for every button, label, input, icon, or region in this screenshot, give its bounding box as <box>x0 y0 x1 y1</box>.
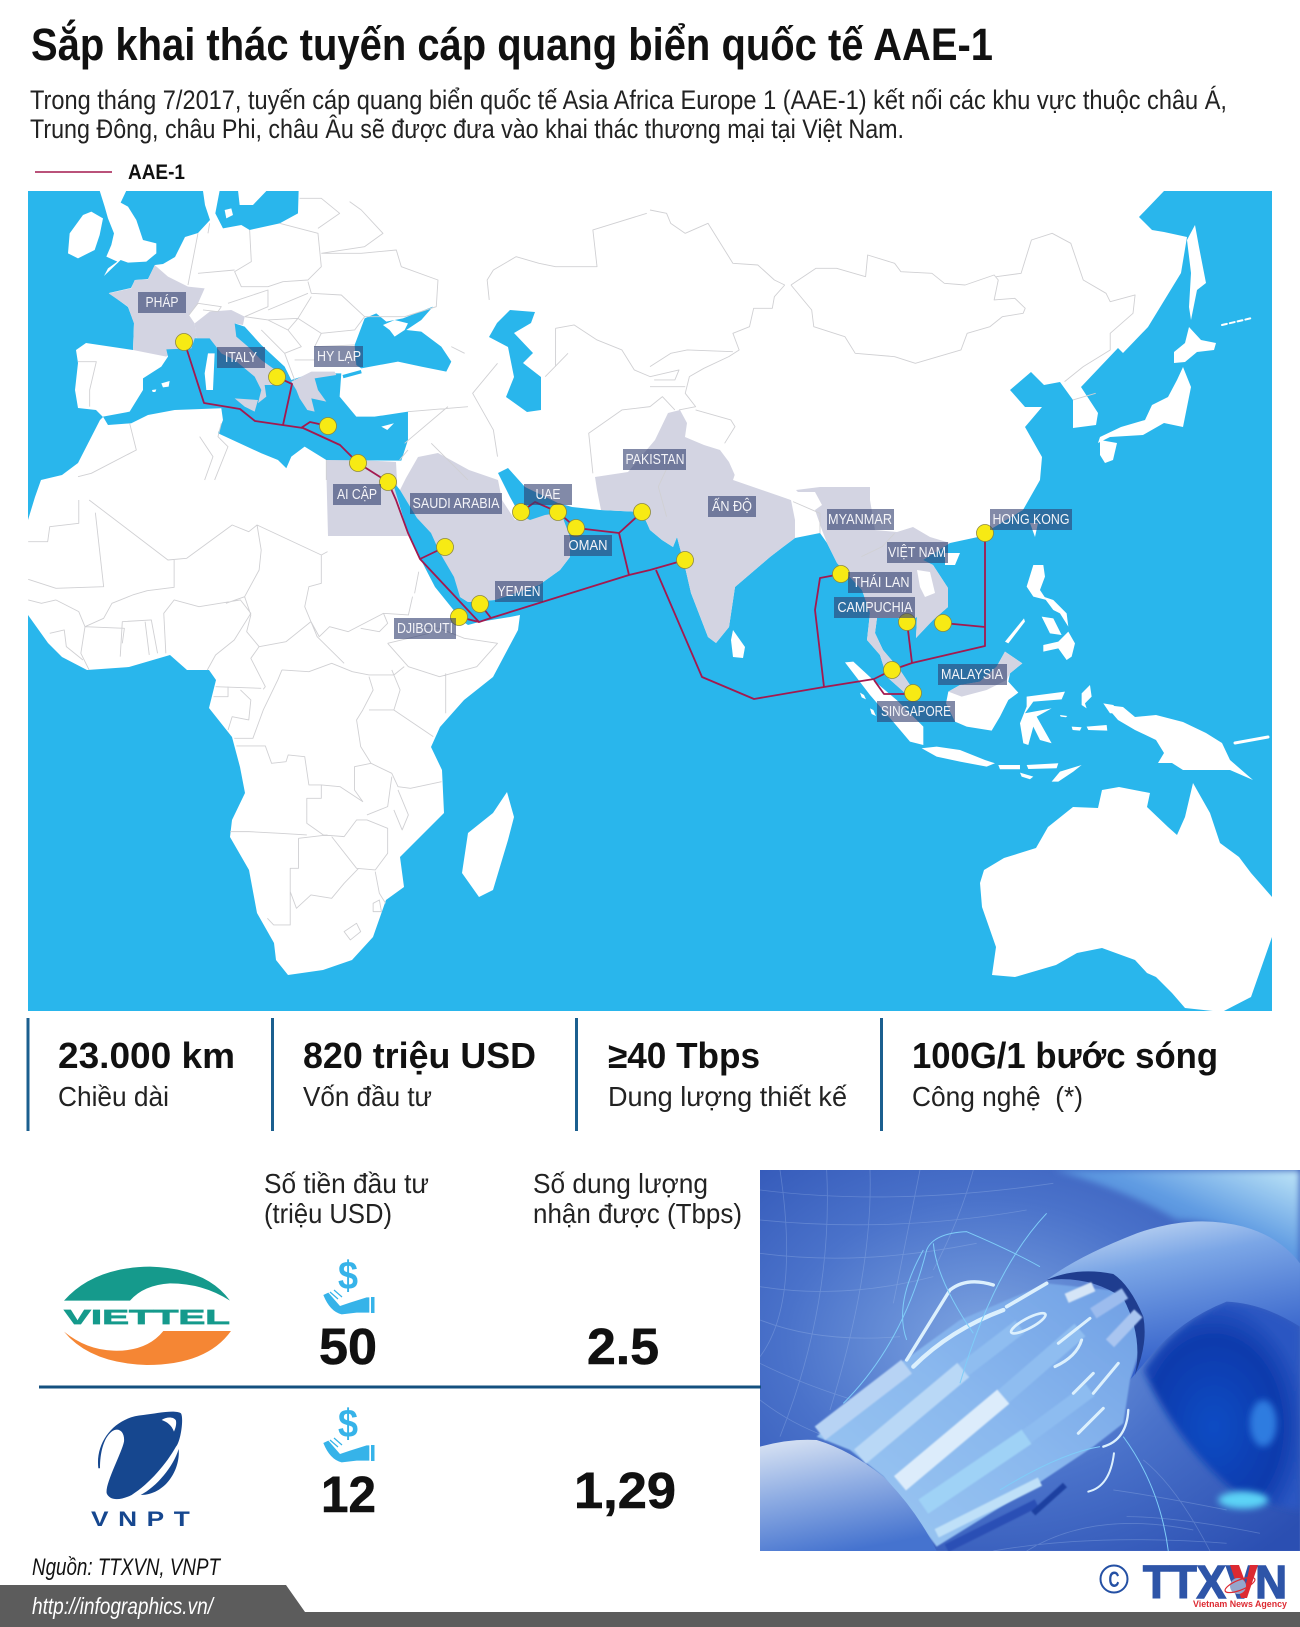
footer url: http://infographics.vn/ <box>32 1593 215 1619</box>
land: Africa and Eurasia <box>28 191 1187 975</box>
country labels <box>138 292 1072 722</box>
value: VNPT investment 12: 12 <box>321 1466 376 1523</box>
France <box>109 265 205 357</box>
stat: investment: Vốn đầu tư <box>303 1081 432 1112</box>
mesh pattern <box>760 1170 1260 1551</box>
table header: capacity: Số dung lượng <box>533 1168 708 1199</box>
white inland area <box>733 468 1038 597</box>
country labels: YEMEN <box>498 584 540 600</box>
Mediterranean <box>103 323 408 468</box>
Caspian <box>489 310 541 412</box>
icon: money in hand, Viettel <box>323 1254 374 1314</box>
borders West Asia <box>473 213 650 473</box>
borders of Europe and North Africa <box>78 198 468 480</box>
country labels: THÁI LAN <box>852 574 910 591</box>
fibre bundles <box>820 1287 1138 1548</box>
country labels: SAUDI ARABIA <box>412 496 500 512</box>
stat: capacity: Dung lượng thiết kế <box>608 1081 847 1112</box>
intro text <box>30 85 1227 144</box>
Borneo Malaysia <box>948 652 1022 697</box>
country labels: HONG KONG <box>992 512 1070 528</box>
logo: TTXVN: C <box>1108 1567 1120 1592</box>
country labels: PHÁP <box>146 294 178 311</box>
Egypt <box>326 458 408 536</box>
logo: TTXVN: TTXVN <box>1143 1556 1287 1608</box>
table header: investment: Số tiền đầu tư <box>264 1168 429 1199</box>
country labels: DJIBOUTI <box>397 621 453 637</box>
small islands <box>1222 318 1268 743</box>
lower left sheath <box>760 1440 937 1551</box>
stat: technology: Công nghệ (*) <box>912 1081 1083 1112</box>
Black Sea <box>355 307 451 372</box>
stat: capacity: ≥40 Tbps <box>608 1035 760 1076</box>
Sicily <box>235 398 258 412</box>
country labels: UAE <box>536 487 561 503</box>
source: Nguồn: TTXVN, VNPT <box>32 1554 222 1581</box>
country labels: AI CẬP <box>337 486 377 503</box>
cable opening <box>1047 1271 1145 1375</box>
borders Central and East Asia <box>650 210 1135 557</box>
logo: VNPT <box>91 1412 190 1531</box>
panel: world map <box>28 190 1272 1012</box>
title: Sắp khai thác tuyến cáp quang biển quốc tế AAE-1 <box>31 19 993 70</box>
photo: fibre optic cable <box>760 1170 1300 1551</box>
country labels: ẤN ĐỘ <box>712 498 752 515</box>
stat: capacity <box>575 1018 847 1131</box>
Ireland <box>68 212 103 258</box>
country labels: MALAYSIA <box>941 667 1003 683</box>
Red Sea <box>394 485 460 610</box>
stat: technology: 100G/1 bước sóng <box>912 1035 1218 1076</box>
country labels: PAKISTAN <box>626 452 684 468</box>
stat: length: Chiều dài <box>58 1081 169 1112</box>
Saudi Arabia, UAE, Oman, Yemen <box>400 453 570 602</box>
Pakistan and India <box>595 410 795 643</box>
logo: VNPT: VNPT <box>91 1507 190 1531</box>
country labels: VIỆT NAM <box>888 544 946 561</box>
table header: investment: (triệu USD) <box>264 1198 392 1229</box>
stat: technology <box>880 1018 1218 1131</box>
legend: AAE-1 line: AAE-1 <box>128 161 185 184</box>
country labels: ITALY <box>225 350 257 366</box>
landing points <box>176 334 994 702</box>
land: islands in the east <box>462 225 1272 1012</box>
stat: length: 23.000 km <box>58 1035 235 1076</box>
logo: TTXVN: Vietnam News Agency <box>1193 1599 1288 1610</box>
dark core <box>1143 1302 1300 1510</box>
upper right glow <box>1060 1170 1300 1263</box>
logo: Viettel: VIETTEL <box>64 1307 230 1329</box>
table header: investment <box>264 1168 429 1229</box>
ocean <box>28 191 1272 1011</box>
icon: money in hand, Viettel: $ <box>338 1254 358 1298</box>
table header: capacity <box>533 1168 742 1229</box>
value: Viettel investment 50: 50 <box>319 1318 377 1375</box>
fibres <box>907 1282 1128 1492</box>
outer sheath upper <box>1047 1221 1300 1380</box>
country labels: CAMPUCHIA <box>838 600 913 616</box>
Mediterranean islands <box>205 353 215 390</box>
country labels: SINGAPORE <box>881 704 951 720</box>
stat: investment: 820 triệu USD <box>303 1035 536 1076</box>
value: Viettel capacity 2.5: 2.5 <box>587 1318 659 1375</box>
panel: key statistics <box>26 1018 1218 1131</box>
Greece <box>291 372 336 412</box>
Myanmar, Thailand, Vietnam, Malaysia peninsula <box>796 487 950 697</box>
cable route AAE-1 <box>187 350 985 699</box>
footer bar <box>0 1585 1300 1627</box>
stat: length <box>26 1018 235 1131</box>
logo: Viettel <box>64 1267 231 1365</box>
Crimea <box>383 320 408 337</box>
cable fibres mass <box>817 1283 1143 1547</box>
stat: investment <box>271 1018 536 1131</box>
borders Africa <box>28 500 498 940</box>
table header: capacity: nhận được (Tbps) <box>533 1198 742 1229</box>
Britain <box>100 191 156 276</box>
country labels: HY LẠP <box>317 349 361 365</box>
Marmara <box>343 372 361 377</box>
land: Southeast Asian islands <box>845 565 1120 782</box>
row divider <box>39 1386 761 1388</box>
Persian Gulf <box>498 468 572 520</box>
gray countries <box>326 410 950 697</box>
seas and Europe in detail <box>68 190 468 480</box>
country labels: MYANMAR <box>828 512 892 528</box>
intro text: Trung Đông, châu Phi, châu Âu sẽ được đưa vào khai thác thương mại tại Việt Nam. <box>30 113 904 144</box>
value: VNPT capacity 1,29: 1,29 <box>574 1462 676 1519</box>
bright spots <box>1218 1400 1277 1509</box>
country labels: OMAN <box>568 538 608 554</box>
icon: money in hand, VNPT <box>323 1402 374 1462</box>
Baltic <box>215 191 299 230</box>
Italy <box>194 310 274 404</box>
icon: money in hand, VNPT: $ <box>338 1402 358 1446</box>
